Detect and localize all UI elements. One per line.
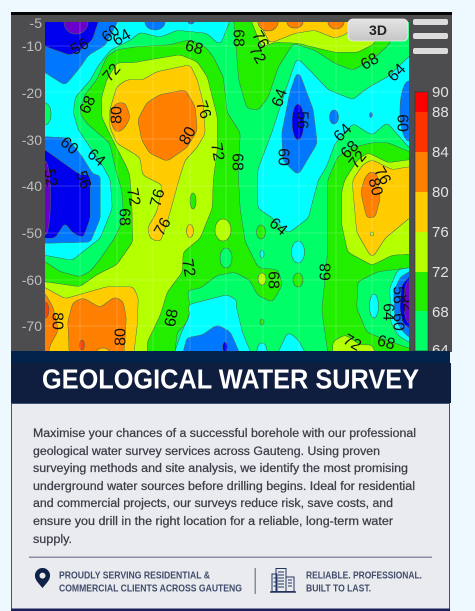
contour labels: 64 <box>380 303 396 321</box>
body text: geological water survey services across Gauteng. Using proven <box>33 446 380 458</box>
body text: surveying methods and site analysis, we identify the most promising <box>33 463 408 475</box>
colour legend: 84 <box>432 144 449 161</box>
contour labels: 80 <box>176 124 200 148</box>
region: isolated blobs <box>186 193 304 325</box>
colour legend: 88 <box>432 104 449 121</box>
contour labels: 64 <box>110 26 134 50</box>
region: bottom-centre lows <box>174 295 304 351</box>
depth axis labels: -5 <box>30 15 42 31</box>
footer text: service area <box>59 570 242 594</box>
title: GEOLOGICAL WATER SURVEY <box>42 364 419 394</box>
contour labels: 68 <box>264 271 282 289</box>
depth axis labels: -50 <box>22 225 42 241</box>
colour legend: 80 <box>432 184 449 201</box>
region: central 68-72 band <box>45 40 282 351</box>
contour labels: 68 <box>116 208 132 226</box>
depth axis labels: -60 <box>22 272 42 288</box>
contour labels: 72 <box>346 148 370 172</box>
contour labels: 72 <box>245 43 269 67</box>
footer text: tagline: RELIABLE. PROFESSIONAL. <box>306 570 422 582</box>
panel: description <box>11 404 450 611</box>
contour labels: 68 <box>375 332 397 354</box>
icon: buildings <box>270 568 296 592</box>
contour labels: 60 <box>390 313 406 331</box>
colour legend: 72 <box>432 264 449 281</box>
contour labels: 68 <box>162 308 182 328</box>
contour labels: 68 <box>338 138 362 162</box>
body text: Maximise your chances of a successful borehole with our professional <box>33 428 416 440</box>
colour legend: 90 <box>432 84 449 101</box>
region: bottom-left highs <box>45 286 138 351</box>
depth axis labels: -10 <box>22 38 42 54</box>
region: central 76-80 band <box>110 65 205 242</box>
region: bottom-right lows <box>332 268 409 351</box>
body text <box>33 428 416 546</box>
contour labels: 68 <box>358 50 382 74</box>
footer text: service area: COMMERCIAL CLIENTS ACROSS GAUTENG <box>59 582 242 594</box>
contour labels: 72 <box>340 331 364 355</box>
region: upper-right cyan low <box>258 56 409 232</box>
contour labels: 56 <box>294 111 310 129</box>
region: central orange highs <box>110 90 197 161</box>
icon: location pin <box>35 568 50 588</box>
region: central 72-76 band <box>45 55 218 351</box>
contour labels: 68 <box>230 29 246 47</box>
contour labels: 80 <box>364 176 386 198</box>
contour labels: 72 <box>207 142 227 162</box>
contour labels: 76 <box>248 28 272 52</box>
contour labels: 52 <box>400 294 416 312</box>
contour labels: 68 <box>228 153 246 171</box>
contour labels: 68 <box>77 93 100 117</box>
contour labels: 64 <box>331 121 355 145</box>
contour labels: 76 <box>370 164 394 188</box>
contour labels: 56 <box>72 169 94 191</box>
contour labels: 56 <box>68 35 92 59</box>
contour labels: 68 <box>318 263 334 281</box>
contour labels: 80 <box>112 328 130 346</box>
colour legend: 76 <box>432 224 449 241</box>
region: top-left lows <box>45 22 230 260</box>
colour legend <box>415 84 449 359</box>
contour labels: 60 <box>99 22 123 46</box>
footer text: tagline <box>306 570 422 594</box>
depth axis labels: -20 <box>22 85 42 101</box>
contour labels: 64 <box>84 146 108 170</box>
colour legend: 64 <box>432 342 449 359</box>
contour labels: 64 <box>385 61 409 85</box>
depth axis labels: -70 <box>22 318 42 334</box>
body text: supply. <box>33 534 72 546</box>
contour labels: 80 <box>48 312 66 330</box>
footer text: tagline: BUILT TO LAST. <box>306 582 371 594</box>
contour labels: 64 <box>266 215 290 239</box>
contour map <box>45 22 409 351</box>
colour legend: 68 <box>432 304 449 321</box>
body text: ensure you drill in the right location for a reliable, long-term water <box>33 516 393 528</box>
contour labels: 72 <box>100 61 124 85</box>
3D button <box>348 19 408 41</box>
contour labels: 72 <box>123 187 143 207</box>
title band <box>11 351 451 403</box>
contour labels: 76 <box>147 187 169 209</box>
contour labels: 72 <box>178 258 198 278</box>
footer text: service area: PROUDLY SERVING RESIDENTIAL & <box>59 570 210 582</box>
body text: underground water sources before drilling begins. Ideal for residential <box>33 481 415 493</box>
body text: and commercial projects, our surveys reduce risk, save costs, and <box>33 498 393 510</box>
contour labels: 80 <box>108 106 126 124</box>
chart frame <box>11 12 452 352</box>
contour labels: 64 <box>269 87 291 109</box>
contour labels: 60 <box>57 134 81 158</box>
region: top-centre highs <box>234 22 391 110</box>
contour labels: 52 <box>40 168 60 188</box>
depth axis labels: -30 <box>22 132 42 148</box>
contour labels: 76 <box>192 99 214 121</box>
contour labels: 68 <box>183 37 205 59</box>
contour labels: 56 <box>390 286 406 304</box>
contour labels <box>40 22 417 355</box>
contour labels: 60 <box>394 114 410 132</box>
contour labels: 76 <box>151 215 175 239</box>
3D button: 3D <box>369 22 387 38</box>
depth axis labels <box>22 15 42 334</box>
contour labels: 60 <box>274 148 292 166</box>
icon: menu bars <box>413 19 448 54</box>
depth axis labels: -40 <box>22 178 42 194</box>
region: right highs <box>322 142 409 351</box>
